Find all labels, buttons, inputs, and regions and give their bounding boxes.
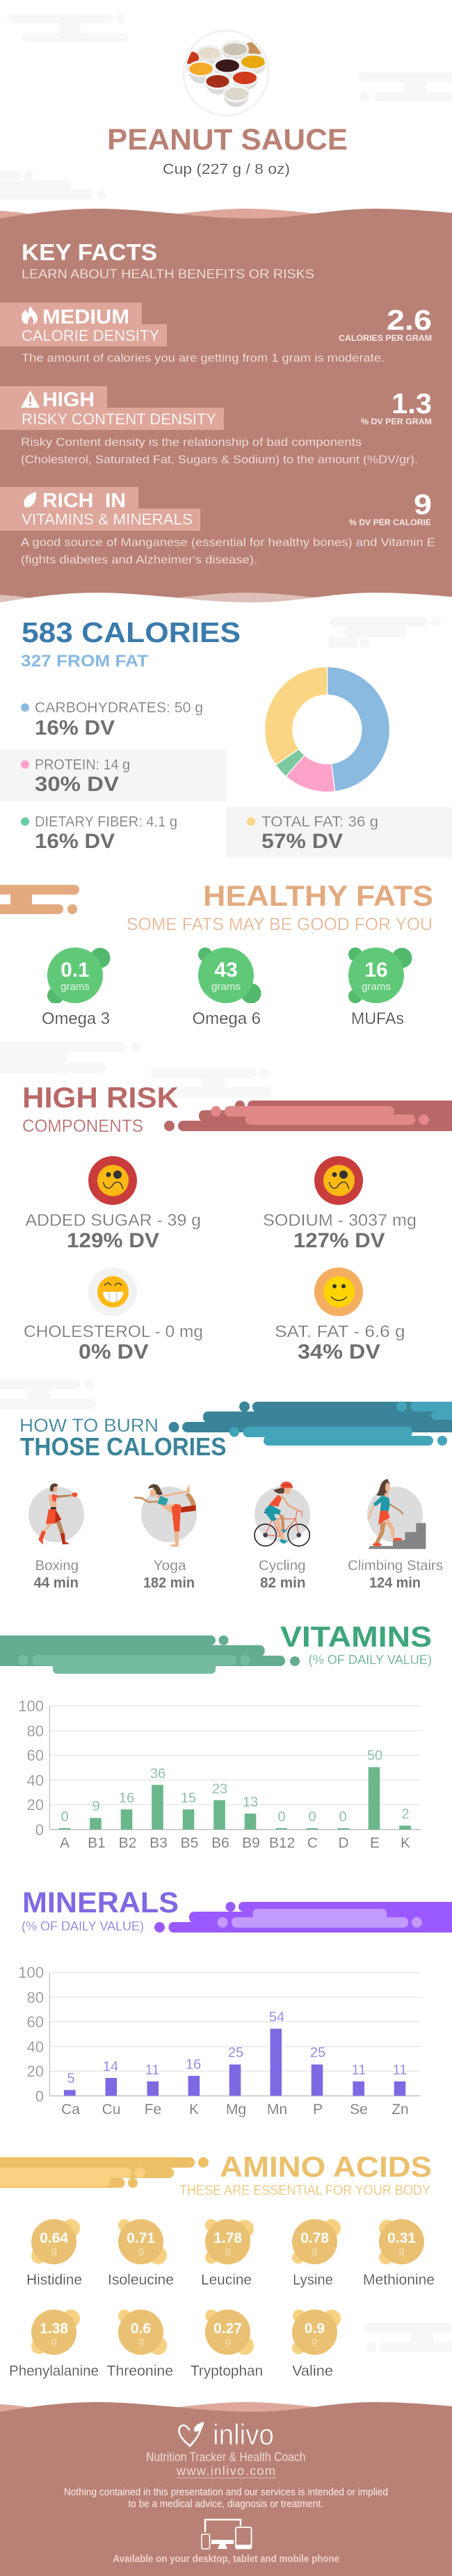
badge: histidine: 0.64	[40, 2230, 68, 2246]
icon: leaf	[24, 492, 36, 508]
item: saturated fat: 34% DV	[298, 1341, 380, 1363]
badge: histidine: g	[51, 2245, 57, 2257]
badge: omega 3: grams	[60, 981, 90, 993]
bar chart: vitamins: 2	[401, 1807, 410, 1822]
healthy fats heading: HEALTHY FATS	[203, 879, 433, 912]
legend: total fat	[247, 814, 378, 853]
badge: valine: 0.9	[305, 2321, 325, 2337]
badge: leucine: g	[225, 2245, 231, 2257]
badge: threonine: g	[138, 2335, 144, 2347]
decorative cloud: purple	[154, 1902, 452, 1933]
icon: devices	[202, 2520, 252, 2549]
bar chart: minerals: 60	[27, 2013, 44, 2031]
bar chart: minerals: Mg	[226, 2102, 246, 2118]
badge: methionine: 0.31	[387, 2230, 416, 2246]
bar chart: minerals: 11	[393, 2063, 407, 2078]
bar chart: vitamins: 0	[308, 1809, 316, 1825]
rating: medium: MEDIUM	[42, 306, 129, 328]
bar chart: vitamins: 100	[18, 1697, 44, 1715]
activity labels: 124 min	[369, 1575, 421, 1591]
badge: histidine: Histidine	[26, 2272, 82, 2288]
badge: tryptophan: 0.27	[213, 2321, 242, 2337]
bar chart: vitamins: B12	[269, 1835, 295, 1851]
calories heading: 583 CALORIES	[22, 616, 241, 648]
badge: lysine	[292, 2219, 341, 2288]
brand name: inlivo	[213, 2418, 274, 2451]
badge: phenylalanine: Phenylalanine	[9, 2363, 99, 2379]
minerals subheading: (% OF DAILY VALUE)	[22, 1919, 144, 1933]
badge: leucine: Leucine	[201, 2272, 252, 2288]
bar chart: vitamins: 0	[277, 1809, 286, 1825]
bar chart: vitamins: B5	[181, 1835, 198, 1851]
legend: protein	[21, 757, 130, 796]
panel: healthy fats	[0, 879, 433, 1028]
item: saturated fat	[275, 1267, 405, 1363]
description	[21, 536, 435, 566]
icon: food photo of sauce bowls	[182, 31, 268, 115]
badge: omega 6: 43	[214, 959, 238, 982]
badge: isoleucine: 0.71	[127, 2230, 155, 2246]
item: added sugar: 129% DV	[67, 1229, 159, 1252]
badge: isoleucine: g	[138, 2245, 144, 2257]
amino acids heading: AMINO ACIDS	[220, 2150, 432, 2183]
bar chart: minerals: Cu	[102, 2102, 120, 2118]
bar chart: vitamins: K	[401, 1835, 410, 1851]
bar chart: minerals: 20	[27, 2063, 44, 2080]
disclaimer: to be a medical advice, diagnosis or treatment.	[128, 2498, 323, 2510]
bar chart: minerals: 16	[186, 2057, 201, 2072]
key facts subheading: LEARN ABOUT HEALTH BENEFITS OR RISKS	[22, 266, 314, 281]
legend: total fat: 57% DV	[261, 830, 343, 853]
decorative cloud: teal	[168, 1401, 452, 1446]
activity labels: 44 min	[33, 1575, 79, 1591]
legend: protein: 30% DV	[35, 773, 119, 796]
item: cholesterol: 0% DV	[79, 1341, 149, 1363]
disclaimer: Nothing contained in this presentation and our services is intended or implied	[64, 2486, 388, 2498]
icon: inlivo heart logo	[179, 2422, 204, 2446]
bar chart: vitamins: C	[307, 1835, 318, 1851]
bar chart: vitamins: 9	[92, 1799, 100, 1814]
bar chart: minerals: 25	[310, 2045, 325, 2061]
activity: cycling	[255, 1482, 310, 1546]
decorative cloud: orange	[0, 885, 79, 914]
badge: leucine	[201, 2219, 254, 2288]
bar chart: vitamins: 80	[27, 1722, 44, 1740]
panel: key facts	[0, 209, 452, 612]
vitamins subheading: (% OF DAILY VALUE)	[309, 1652, 432, 1667]
vitamins heading: VITAMINS	[280, 1620, 432, 1653]
calories from fat: 327 FROM FAT	[21, 652, 148, 671]
decorative cloud: yellow	[0, 2157, 209, 2188]
bar chart: minerals: 25	[228, 2045, 243, 2061]
badge: omega 6: Omega 6	[192, 1009, 261, 1028]
bar chart: minerals: 40	[27, 2038, 44, 2056]
badge: phenylalanine: 1.38	[40, 2321, 68, 2337]
title: PEANUT SAUCE	[107, 123, 348, 157]
rating label: RISKY CONTENT DENSITY	[22, 410, 216, 428]
value unit: % DV PER GRAM	[361, 417, 432, 426]
badge: MUFAs: 16	[364, 959, 388, 982]
bar chart: minerals: Se	[350, 2102, 368, 2118]
badge: isoleucine: Isoleucine	[108, 2272, 174, 2288]
bar chart: vitamins: B6	[211, 1835, 229, 1851]
activity labels: 182 min	[143, 1575, 195, 1591]
badge: phenylalanine: g	[51, 2335, 57, 2347]
badge: methionine: Methionine	[363, 2272, 435, 2288]
bar chart: vitamins: B9	[242, 1835, 260, 1851]
value 9: 9	[414, 488, 432, 520]
bar chart: vitamins: 16	[119, 1791, 134, 1806]
amino acids subheading: THESE ARE ESSENTIAL FOR YOUR BODY	[179, 2183, 430, 2198]
value 2.6: 2.6	[387, 304, 432, 336]
description: (fights diabetes and Alzheimer's disease).	[21, 553, 257, 566]
panel: how to burn those calories	[19, 1401, 452, 1591]
minerals heading: MINERALS	[22, 1886, 179, 1919]
availability note: Available on your desktop, tablet and mobile phone	[113, 2553, 339, 2565]
badge: threonine: Threonine	[107, 2363, 173, 2379]
bar chart: vitamins: 0	[35, 1821, 44, 1839]
bar chart: vitamins: 60	[27, 1747, 44, 1764]
fact: rich in vitamins and minerals	[0, 487, 435, 566]
legend: carbohydrates: 16% DV	[35, 717, 115, 739]
legend band: total fat	[226, 807, 452, 858]
activity: climbing stairs	[367, 1479, 426, 1549]
decorative cloud: red	[164, 1101, 452, 1131]
bar chart: minerals: 5	[67, 2071, 75, 2086]
activity labels: Cycling	[259, 1558, 306, 1574]
bar chart: vitamins: 20	[27, 1796, 44, 1814]
badge: MUFAs: grams	[362, 981, 391, 993]
badge: valine: g	[312, 2335, 318, 2347]
item: sodium: 127% DV	[293, 1229, 385, 1252]
bar chart: vitamins: 0	[339, 1809, 347, 1825]
healthy fats subheading: SOME FATS MAY BE GOOD FOR YOU	[127, 915, 433, 934]
bar chart: minerals: Ca	[61, 2102, 80, 2118]
item: cholesterol	[24, 1267, 203, 1363]
badge: omega 3: 0.1	[60, 959, 90, 982]
value unit: % DV PER CALORIE	[349, 518, 431, 527]
legend: dietary fiber: 16% DV	[35, 830, 115, 853]
bar chart: vitamins: 0	[60, 1809, 69, 1825]
badge: lysine: g	[312, 2245, 318, 2257]
item: cholesterol: CHOLESTEROL - 0 mg	[24, 1322, 203, 1341]
badge: MUFAs	[348, 947, 412, 1028]
legend: dietary fiber: DIETARY FIBER: 4.1 g	[35, 814, 177, 830]
activity: boxing	[29, 1483, 84, 1545]
badge: tryptophan: Tryptophan	[191, 2363, 263, 2379]
badge: omega 3	[42, 947, 110, 1028]
activity labels: 82 min	[260, 1575, 306, 1591]
key facts heading: KEY FACTS	[22, 239, 157, 265]
legend: carbohydrates	[21, 700, 203, 739]
bar chart: minerals: K	[189, 2102, 199, 2118]
item: saturated fat: SAT. FAT - 6.6 g	[275, 1322, 405, 1341]
legend: dietary fiber	[21, 814, 177, 853]
bar chart: minerals: Zn	[392, 2102, 409, 2118]
donut chart	[265, 666, 389, 792]
badge: isoleucine	[108, 2219, 174, 2288]
activity labels: Yoga	[153, 1558, 186, 1574]
badge: threonine: 0.6	[131, 2321, 151, 2337]
bar chart: vitamins: D	[338, 1835, 349, 1851]
fact: risky content density	[0, 386, 432, 466]
badge: omega 6	[192, 947, 261, 1028]
panel: footer	[0, 2402, 452, 2576]
burn heading line 2: THOSE CALORIES	[20, 1432, 227, 1461]
panel: high risk components	[22, 1081, 452, 1363]
bar chart: vitamins: 40	[27, 1772, 44, 1789]
bar chart: minerals: 11	[352, 2063, 366, 2078]
badge: MUFAs: MUFAs	[351, 1009, 404, 1028]
activity: yoga	[134, 1484, 197, 1546]
fact: calorie density	[0, 303, 432, 365]
legend: carbohydrates: CARBOHYDRATES: 50 g	[35, 700, 203, 716]
badge: methionine: g	[398, 2245, 405, 2257]
legend: total fat: TOTAL FAT: 36 g	[261, 814, 378, 830]
icon: warning	[21, 391, 40, 408]
panel: vitamins	[0, 1620, 432, 1851]
activity labels	[33, 1558, 443, 1591]
badge: leucine: 1.78	[213, 2230, 242, 2246]
value 1.3: 1.3	[392, 387, 432, 419]
rating label: VITAMINS & MINERALS	[22, 511, 193, 528]
bar chart: minerals: Fe	[145, 2102, 161, 2118]
bar chart: minerals: 14	[103, 2059, 118, 2074]
bar chart: minerals: P	[313, 2102, 323, 2118]
bar chart: vitamins	[18, 1697, 421, 1851]
burn heading line 1: HOW TO BURN	[19, 1415, 159, 1436]
bar chart: vitamins: 13	[243, 1795, 258, 1810]
bar chart: vitamins: E	[370, 1835, 380, 1851]
panel: minerals	[18, 1886, 452, 2118]
description: A good source of Manganese (essential for healthy bones) and Vitamin E	[21, 536, 435, 549]
activity labels: Climbing Stairs	[348, 1558, 443, 1574]
bar chart: vitamins: 15	[181, 1791, 196, 1806]
bar chart: vitamins: B3	[150, 1835, 168, 1851]
bar chart: vitamins: A	[60, 1835, 70, 1851]
value unit: CALORIES PER GRAM	[339, 333, 432, 343]
badge: tryptophan	[191, 2310, 263, 2379]
high risk subheading: COMPONENTS	[22, 1117, 143, 1136]
bar chart: minerals: 80	[27, 1989, 44, 2006]
description: The amount of calories you are getting from 1 gram is moderate.	[22, 351, 385, 365]
badge: omega 3: Omega 3	[42, 1009, 110, 1028]
bar chart: minerals: Mn	[267, 2102, 287, 2118]
legend: protein: PROTEIN: 14 g	[35, 757, 130, 773]
bar chart: vitamins: 23	[212, 1782, 227, 1797]
badge: tryptophan: g	[225, 2335, 231, 2347]
badge: histidine	[26, 2219, 82, 2288]
badge: omega 6: grams	[211, 981, 241, 993]
item: added sugar	[25, 1156, 201, 1252]
rating: rich in: RICH IN	[42, 490, 126, 512]
bar chart: vitamins: 36	[150, 1766, 166, 1782]
bar chart: vitamins: B2	[119, 1835, 136, 1851]
badge: lysine: Lysine	[293, 2272, 333, 2288]
activity labels: Boxing	[35, 1558, 79, 1574]
panel: amino acids	[0, 2150, 435, 2379]
serving size: Cup (227 g / 8 oz)	[163, 161, 290, 177]
disclaimer	[64, 2486, 388, 2510]
bar chart: vitamins: B1	[88, 1835, 106, 1851]
description	[21, 435, 418, 466]
panel: calories	[0, 616, 452, 858]
description: Risky Content density is the relationship of bad components	[21, 435, 362, 449]
bar chart: minerals: 54	[269, 2010, 284, 2025]
bar chart: minerals: 100	[18, 1964, 44, 1981]
badge: phenylalanine	[9, 2310, 99, 2379]
bar chart: minerals: 0	[35, 2088, 44, 2105]
bar chart: minerals	[18, 1964, 421, 2118]
badge: lysine: 0.78	[300, 2230, 329, 2246]
decorative cloud: green	[0, 1635, 300, 1674]
icon: flame	[22, 306, 38, 324]
description: (Cholesterol, Saturated Fat, Sugars & Sodium) to the amount (%DV/gr).	[21, 453, 418, 466]
bar chart: vitamins: 50	[367, 1748, 382, 1763]
badge: methionine	[363, 2219, 435, 2288]
legend band: protein	[0, 750, 227, 801]
item: sodium	[263, 1156, 417, 1252]
item: added sugar: ADDED SUGAR - 39 g	[25, 1211, 201, 1230]
bar chart: minerals: 11	[145, 2063, 159, 2078]
tagline: Nutrition Tracker & Health Coach	[146, 2450, 306, 2464]
badge: valine: Valine	[292, 2363, 333, 2379]
item: sodium: SODIUM - 3037 mg	[263, 1211, 417, 1230]
high risk heading: HIGH RISK	[22, 1081, 179, 1114]
badge: valine	[292, 2310, 341, 2379]
rating label: CALORIE DENSITY	[22, 327, 159, 344]
rating: high: HIGH	[42, 389, 95, 411]
website link: www.inlivo.com	[176, 2464, 275, 2478]
badge: threonine	[107, 2310, 173, 2379]
